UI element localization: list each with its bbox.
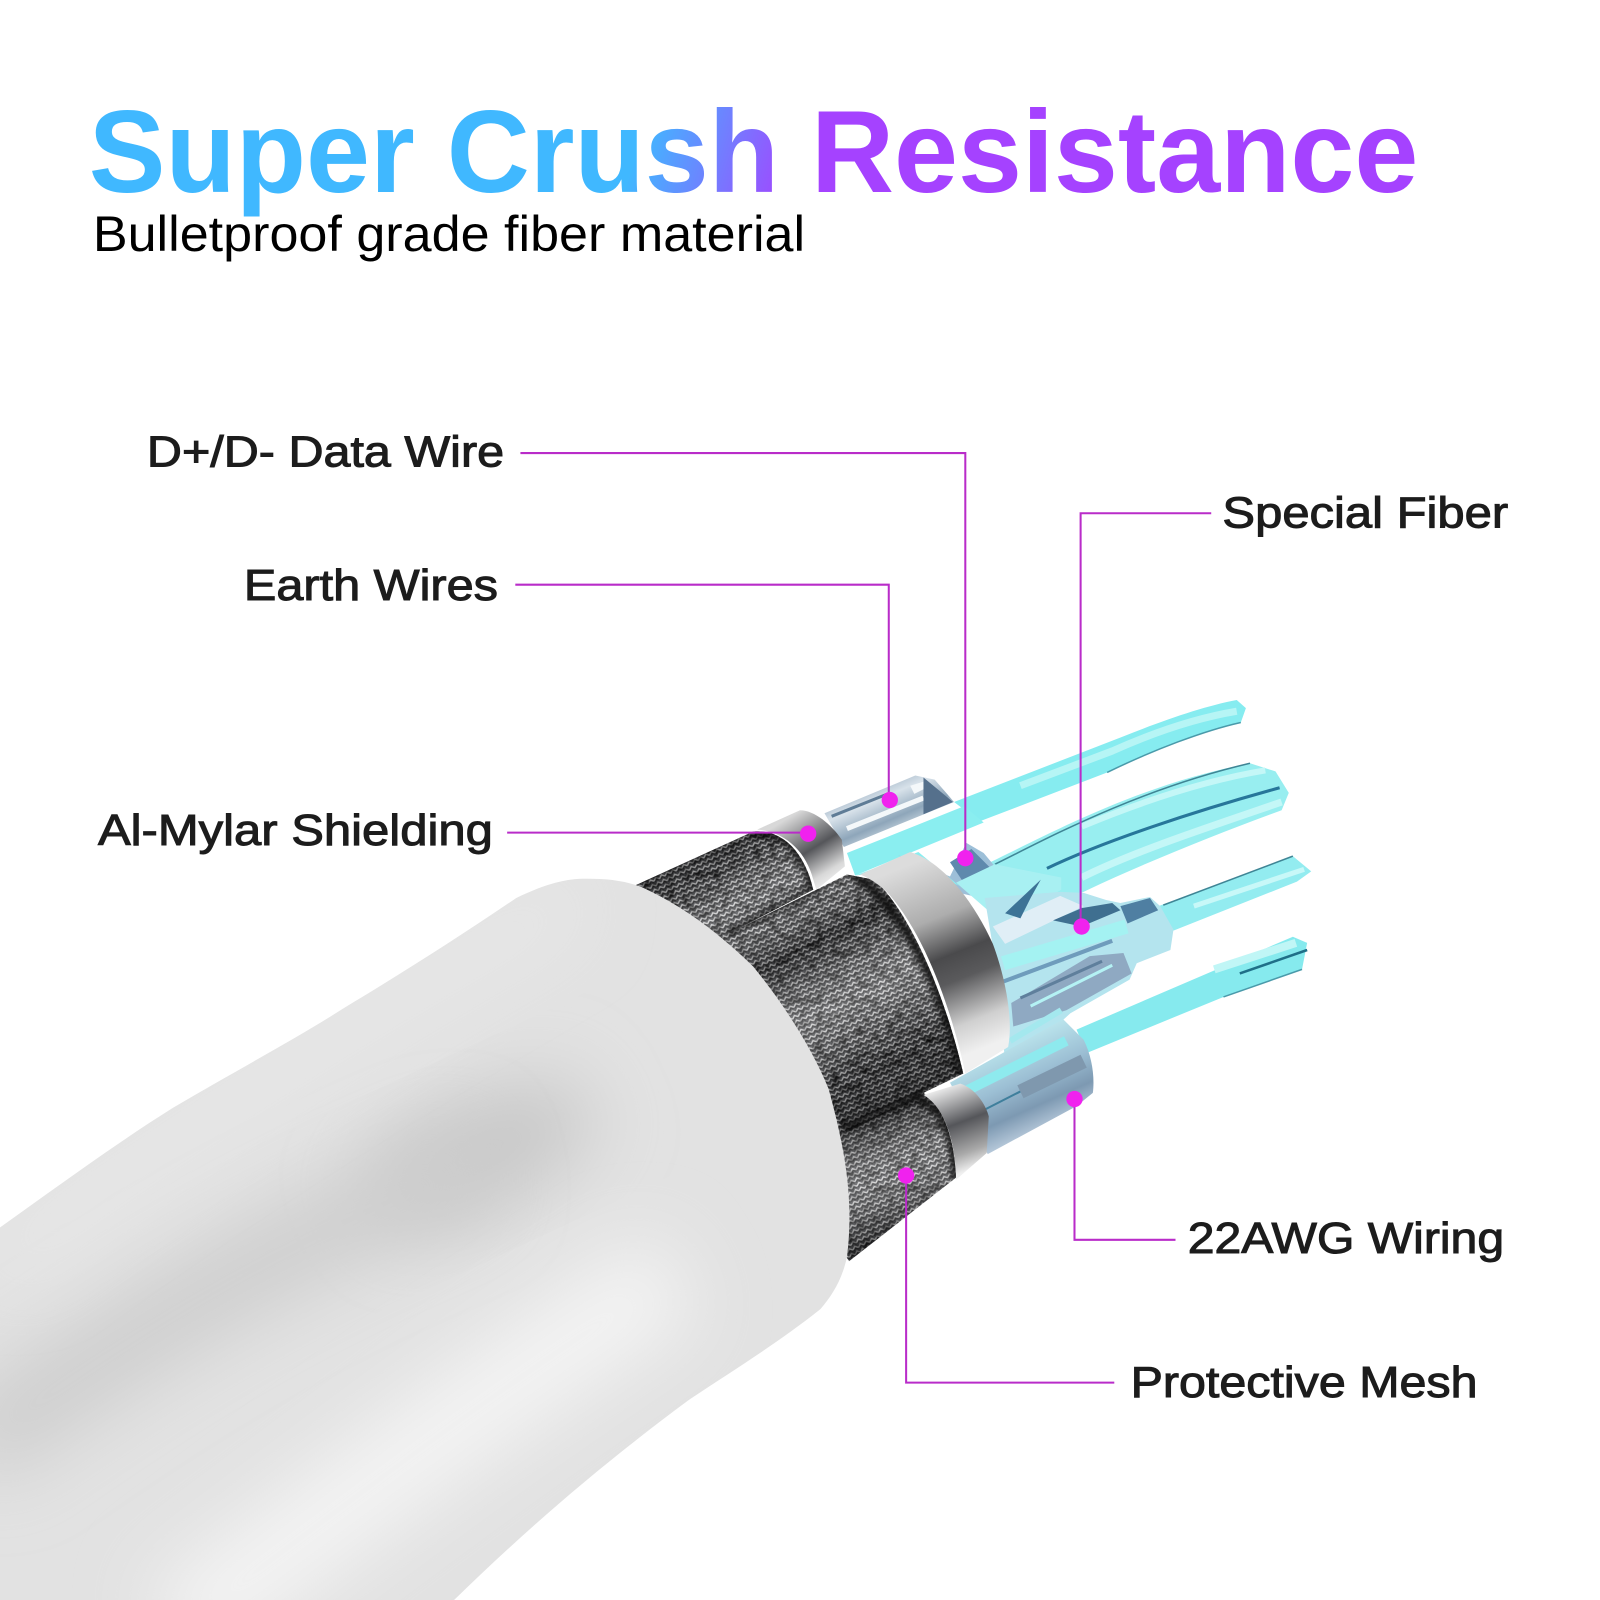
shading: top strand xyxy=(612,831,813,944)
metal band: top strand xyxy=(757,810,845,890)
earth wire xyxy=(824,776,954,847)
cable illustration xyxy=(0,700,1311,1600)
fiber: top strand xyxy=(847,700,1246,876)
shading: lower strand xyxy=(827,1097,956,1261)
callout: 22AWG Wiring xyxy=(1066,1091,1504,1263)
callout: Al-Mylar Shielding: Al-Mylar Shielding xyxy=(98,806,493,855)
callout: Earth Wires xyxy=(244,561,898,808)
22AWG wire xyxy=(950,1019,1093,1154)
metal band: large strand xyxy=(860,852,1010,1073)
callout: 22AWG Wiring: 22AWG Wiring xyxy=(1188,1214,1504,1263)
data wire cluster xyxy=(855,843,1173,1061)
callout: Protective Mesh xyxy=(898,1167,1478,1407)
callout: Special Fiber: Special Fiber xyxy=(1222,489,1508,538)
callout: Protective Mesh: Protective Mesh xyxy=(1131,1358,1478,1407)
fiber: second strand cluster xyxy=(980,763,1289,913)
fiber: bottom strand xyxy=(1077,937,1307,1053)
callout: D+/D- Data Wire: D+/D- Data Wire xyxy=(147,427,504,476)
metal band: lower strand xyxy=(923,1084,989,1180)
callout: Earth Wires: Earth Wires xyxy=(244,561,498,610)
callout: D+/D- Data Wire xyxy=(147,427,973,866)
shading: large strand xyxy=(704,874,963,1133)
strand shadows xyxy=(727,831,963,1178)
callout: Al-Mylar Shielding xyxy=(98,806,816,855)
title: Super Crush Resistance xyxy=(89,86,1418,217)
subtitle: Bulletproof grade fiber material xyxy=(93,206,805,262)
white cable jacket xyxy=(0,867,878,1600)
mesh mottling xyxy=(642,834,964,1258)
mesh underlay and strands xyxy=(636,831,964,1262)
fiber: third strand xyxy=(1153,856,1311,931)
callout: Special Fiber xyxy=(1073,489,1508,935)
